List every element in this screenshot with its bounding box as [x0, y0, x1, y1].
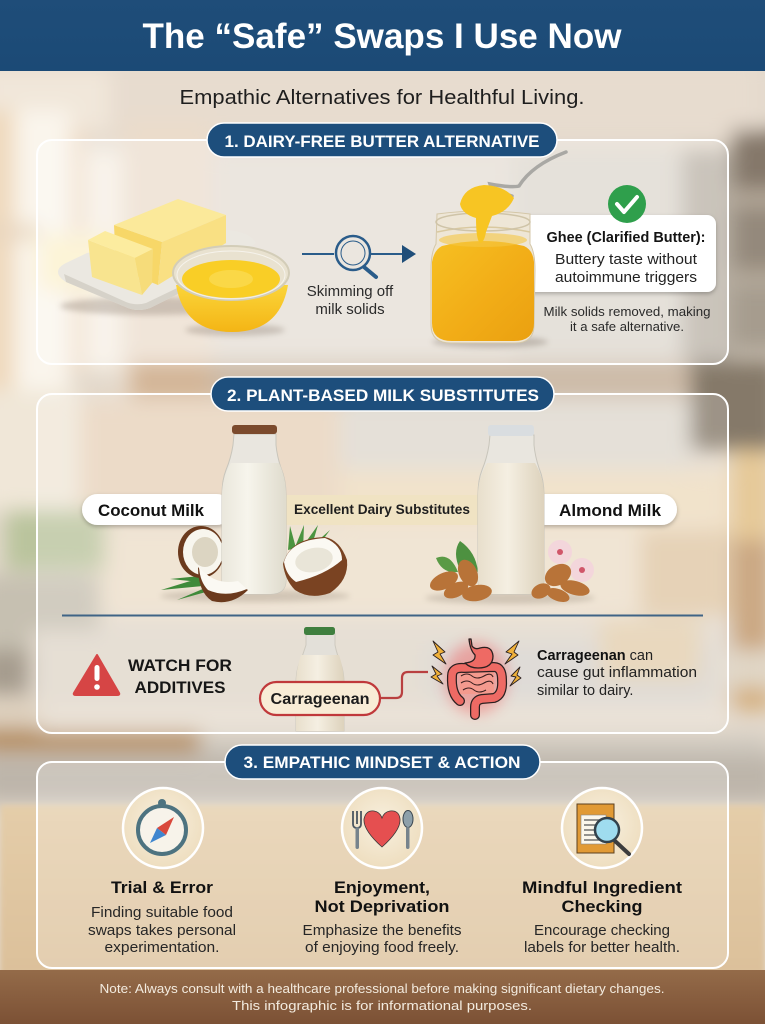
column: enjoyment, not deprivation: Enjoyment,: [334, 878, 430, 897]
label: carrageenan: Carrageenan: [270, 691, 370, 708]
section heading 1: [207, 123, 557, 157]
text: watch for additives: WATCH FOR: [128, 657, 232, 675]
column: mindful ingredient checking: Mindful Ingredient: [522, 878, 682, 897]
callout: ghee: Ghee (Clarified Butter):: [546, 230, 706, 246]
column: enjoyment, not deprivation: [302, 788, 462, 956]
column: trial and error: swaps takes personal: [88, 923, 236, 939]
text: carrageenan warning: [537, 648, 697, 699]
illustration: almond milk bottle with almonds: [425, 425, 595, 605]
label band: excellent dairy substitutes: Excellent Dairy Substitutes: [294, 502, 470, 517]
illustration: bottle with additive: [296, 627, 344, 731]
text: skimming off milk solids: Skimming off: [307, 283, 394, 300]
text: carrageenan warning: cause gut inflammation: [537, 665, 697, 681]
column: mindful ingredient checking: Checking: [562, 897, 642, 916]
label: almond milk: [530, 494, 677, 525]
label band: excellent dairy substitutes: [280, 495, 485, 525]
section heading 2: 2. PLANT-BASED MILK SUBSTITUTES: [227, 386, 539, 405]
text: watch for additives: [128, 657, 232, 697]
column: trial and error: experimentation.: [104, 940, 220, 956]
callout: ghee: Buttery taste without: [555, 252, 697, 268]
column: enjoyment, not deprivation: Emphasize the benefits: [302, 923, 462, 939]
section heading 2: [211, 377, 554, 411]
column: mindful ingredient checking: Encourage checking: [534, 923, 670, 939]
title: The “Safe” Swaps I Use Now: [142, 17, 622, 56]
panel: plant-based milk substitutes: [37, 377, 728, 733]
callout: ghee: autoimmune triggers: [555, 270, 697, 286]
label: coconut milk: Coconut Milk: [98, 501, 205, 520]
icon: food package with magnifier: [562, 788, 642, 868]
text: carrageenan warning: Carrageenan can: [537, 648, 653, 664]
label: almond milk: Almond Milk: [559, 501, 662, 520]
divider: [62, 614, 703, 616]
header banner: [0, 0, 765, 71]
footer note: [100, 981, 664, 1013]
text: carrageenan warning: similar to dairy.: [537, 683, 633, 699]
label: coconut milk: [82, 494, 232, 525]
icon: warning triangle: [74, 655, 119, 695]
icon: compass: [123, 788, 203, 868]
footer note: Note: Always consult with a healthcare professional before making significant dietary changes.: [100, 981, 664, 996]
section heading 3: [225, 745, 540, 779]
icon: bowl of melted butter: [173, 246, 289, 336]
text: milk solids removed: it a safe alternative.: [570, 319, 684, 334]
panel: dairy-free butter alternative: [37, 123, 728, 364]
text: watch for additives: ADDITIVES: [134, 679, 226, 697]
subtitle: Empathic Alternatives for Healthful Living.: [180, 87, 584, 109]
icon: inflamed gut with lightning bolts: [431, 639, 521, 715]
icon: butter on a plate: [58, 199, 256, 315]
text: milk solids removed: [544, 304, 710, 334]
column: mindful ingredient checking: labels for better health.: [524, 940, 680, 956]
column: enjoyment, not deprivation: of enjoying food freely.: [305, 940, 459, 956]
text: skimming off milk solids: milk solids: [315, 301, 385, 318]
text: milk solids removed: Milk solids removed, making: [544, 304, 710, 319]
footer note: This infographic is for informational purposes.: [232, 998, 532, 1013]
label: carrageenan: [260, 682, 380, 715]
section heading 1: 1. DAIRY-FREE BUTTER ALTERNATIVE: [224, 132, 540, 151]
panel: empathic mindset and action: [37, 745, 728, 968]
column: trial and error: Trial & Error: [111, 878, 213, 897]
column: trial and error: Finding suitable food: [91, 905, 233, 921]
icon: green check: [608, 185, 646, 223]
callout: ghee: [516, 185, 716, 292]
illustration: coconut milk bottle with coconuts: [160, 425, 350, 602]
section heading 3: 3. EMPATHIC MINDSET & ACTION: [244, 753, 520, 772]
icon: jar of ghee with spoon: [431, 152, 566, 348]
arrow with magnifier: skimming: [302, 236, 416, 277]
icon: heart with fork and spoon: [342, 788, 422, 868]
column: enjoyment, not deprivation: Not Deprivation: [314, 897, 450, 916]
column: trial and error: [88, 788, 236, 956]
column: mindful ingredient checking: [522, 788, 682, 956]
connector line: [380, 672, 428, 698]
